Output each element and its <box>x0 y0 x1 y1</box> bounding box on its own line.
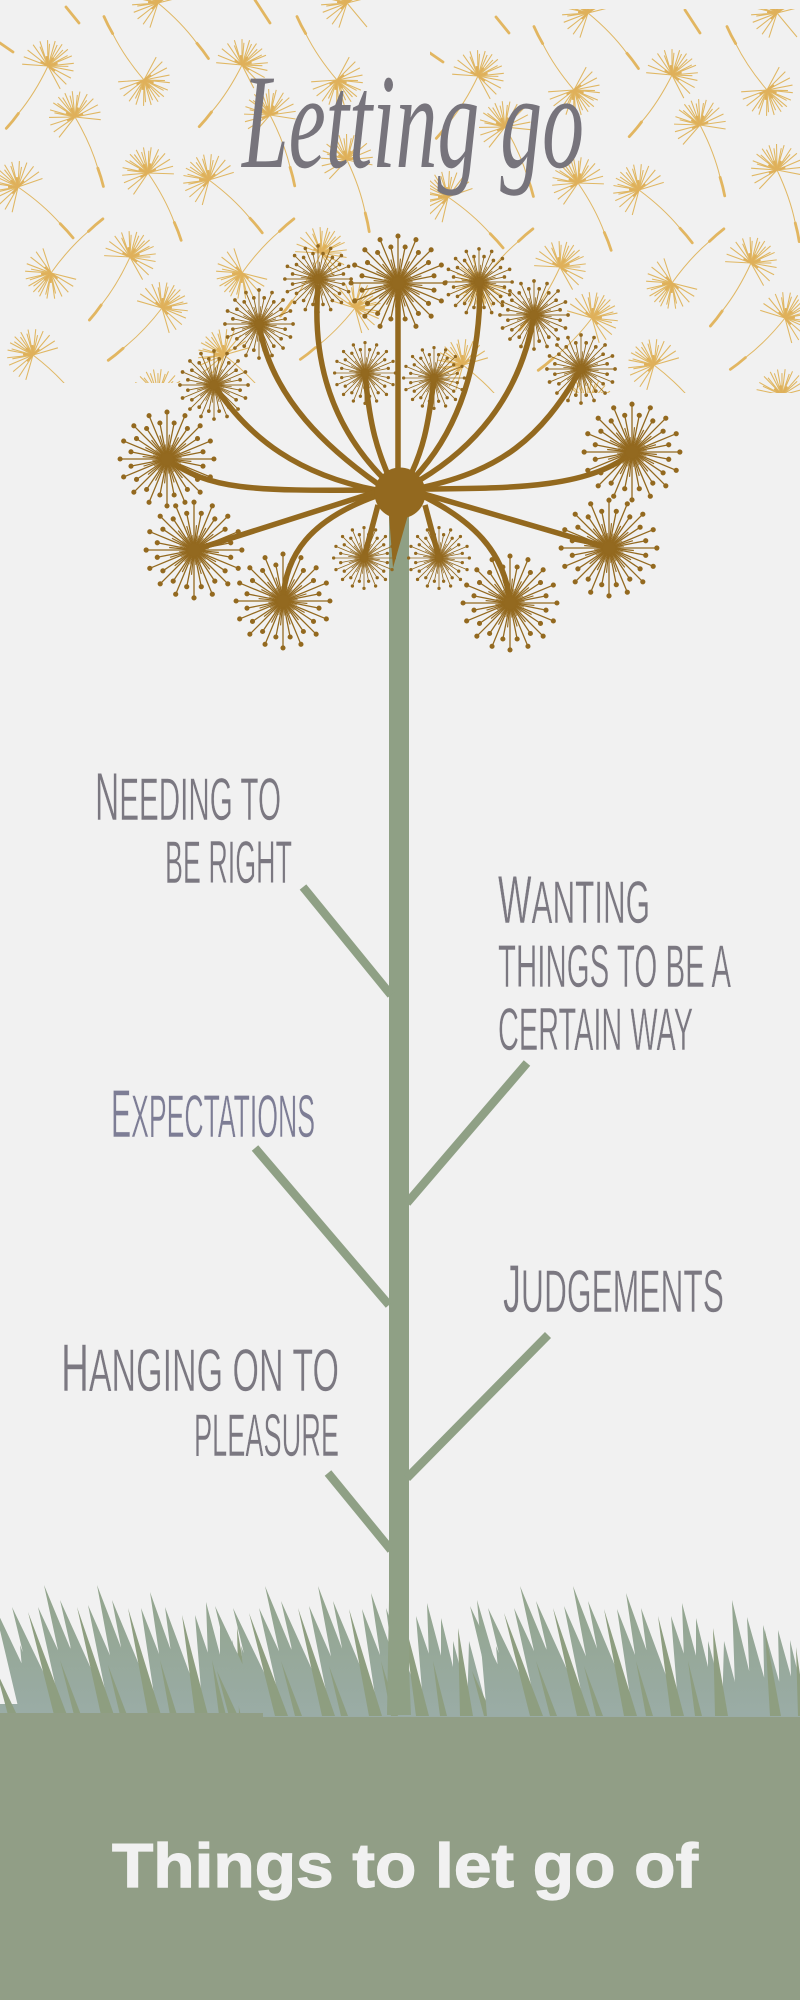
label: wanting things to be a certain way: WANTING <box>498 862 650 938</box>
branch: judgements <box>407 1335 548 1478</box>
seeds: left tile <box>0 0 381 383</box>
ground band <box>0 1713 800 2000</box>
label: needing to be right: NEEDING TO <box>95 759 281 835</box>
stem base over grass <box>387 1600 411 1715</box>
label: needing to be right <box>95 759 292 896</box>
label: wanting things to be a certain way <box>498 862 731 1063</box>
label: hanging on to pleasure <box>61 1330 339 1469</box>
branch: expectations <box>255 1148 389 1305</box>
main stem <box>389 505 409 1695</box>
flower centre <box>374 468 426 568</box>
branch: hanging on to pleasure <box>328 1473 391 1550</box>
text: EXPECTATIONS <box>111 1076 315 1152</box>
branch: wanting things to be a certain way <box>407 1063 527 1203</box>
flower umbel <box>120 236 680 650</box>
text: PLEASURE <box>194 1402 339 1469</box>
flower stalks <box>167 283 632 603</box>
label: hanging on to pleasure: HANGING ON TO <box>61 1330 339 1406</box>
floating dandelion seeds pattern <box>0 0 800 483</box>
flower seed heads <box>120 236 680 650</box>
branch: needing to be right <box>303 887 391 995</box>
seeds: right tile <box>430 9 800 393</box>
title: Letting go <box>241 48 584 197</box>
grass <box>0 1585 800 1718</box>
footer heading: Things to let go of <box>112 1832 698 1901</box>
text: BE RIGHT <box>165 829 292 896</box>
